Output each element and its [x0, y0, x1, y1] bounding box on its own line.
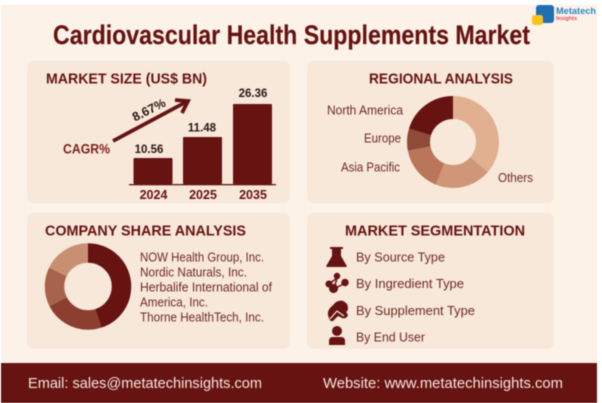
bar chart: 2035 [239, 188, 267, 202]
company list: Herbalife International of [140, 280, 273, 294]
bar chart: 2024 [140, 188, 167, 202]
icon: molecule [326, 274, 348, 292]
region labels: Europe [364, 132, 401, 146]
segment labels [356, 250, 475, 344]
icon: capsules [328, 301, 348, 321]
bar chart: 2025 [189, 188, 217, 202]
heading: company share: COMPANY SHARE ANALYSIS [45, 222, 246, 240]
bar chart: 10.56 [135, 144, 163, 156]
donut chart: regions [418, 108, 488, 176]
heading: market size: MARKET SIZE (US$ BN) [46, 70, 207, 88]
panel: regional analysis [307, 61, 554, 203]
icon: flask [326, 247, 347, 267]
panel: market size [27, 61, 290, 203]
logo: Insights [556, 16, 577, 22]
segment labels: By Source Type [356, 250, 445, 264]
company list: NOW Health Group, Inc. [140, 250, 264, 264]
segment labels: By Supplement Type [356, 303, 475, 318]
panel: market segmentation [307, 213, 554, 349]
logo: Metatech [556, 6, 596, 17]
segment labels: By End User [356, 330, 426, 344]
footer bar [1, 363, 597, 403]
company list: America, Inc. [140, 296, 208, 310]
region labels [327, 104, 533, 185]
arrow: growth [113, 100, 188, 141]
bar chart: 26.36 [239, 88, 267, 100]
company list [140, 250, 273, 324]
company list: Nordic Naturals, Inc. [140, 266, 247, 280]
footer email: Email: sales@metatechinsights.com [28, 375, 262, 392]
bar chart: 11.48 [188, 122, 217, 134]
segment labels: By Ingredient Type [356, 276, 464, 291]
logo [532, 5, 596, 25]
icon: user [329, 326, 345, 345]
region labels: North America [327, 104, 403, 118]
heading: market segmentation: MARKET SEGMENTATION [345, 222, 525, 240]
bar chart [129, 88, 276, 202]
heading: regional analysis: REGIONAL ANALYSIS [369, 70, 513, 88]
company list: Thorne HealthTech, Inc. [140, 310, 264, 324]
CAGR value: 8.67% [130, 96, 168, 124]
region labels: Others [498, 171, 533, 185]
region labels: Asia Pacific [341, 160, 400, 174]
footer website: Website: www.metatechinsights.com [323, 375, 563, 392]
title: Cardiovascular Health Supplements Market [53, 20, 530, 50]
CAGR label: CAGR% [63, 142, 110, 156]
panel: company share analysis [27, 213, 290, 349]
donut chart: companies [54, 253, 122, 320]
